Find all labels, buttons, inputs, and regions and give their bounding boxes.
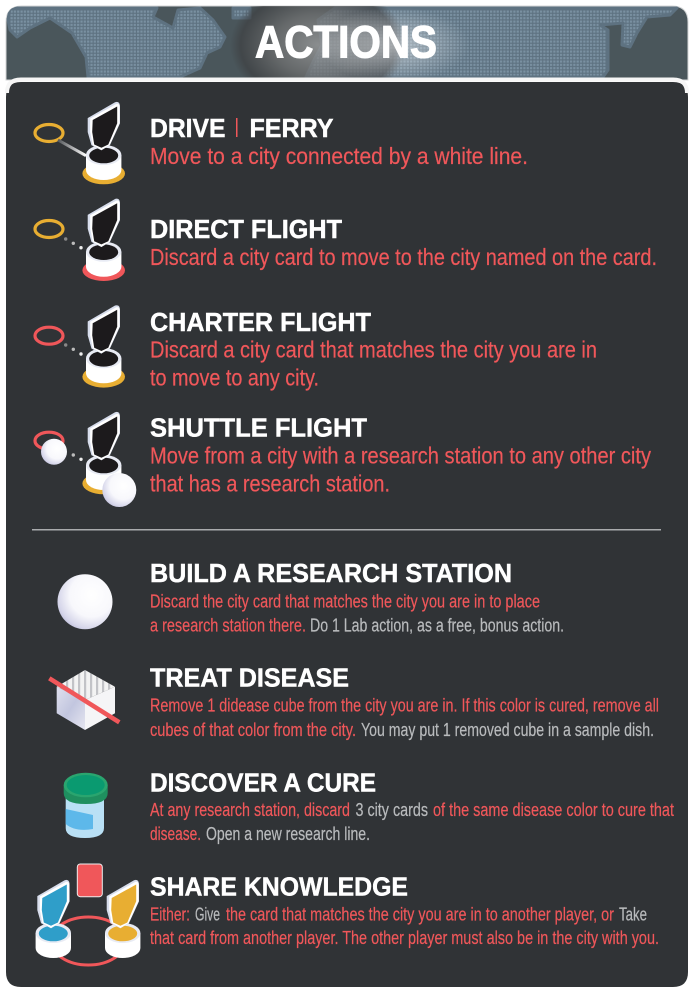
text: share knowledge: Either: [150,904,190,924]
icon: research station [58,574,112,629]
header band: world map with title [6,6,688,80]
icon: disease cube crossed out [49,670,119,730]
text: charter flight: Discard a city card that matches the city you are in [150,336,597,362]
icon: drive pawn [35,102,125,184]
heading: drive ferry: DRIVE [150,113,226,143]
text: share knowledge: Give [195,904,220,924]
text: share knowledge [150,904,659,948]
heading: treat disease: TREAT DISEASE [150,662,349,692]
heading: direct flight: DIRECT FLIGHT [150,214,342,244]
text: discover a cure: Open a new research line. [206,823,370,844]
text: discover a cure: 3 city cards [356,799,428,820]
text: treat disease: cubes of that color from the city. [150,719,356,740]
icon: charter flight pawn [35,306,125,388]
icon: cure jar [64,773,108,838]
text: discover a cure: disease. [150,823,201,844]
heading: share knowledge: SHARE KNOWLEDGE [150,872,408,902]
text: discover a cure [150,799,674,844]
heading: charter flight: CHARTER FLIGHT [150,307,371,337]
text: shuttle flight [150,442,651,496]
text: share knowledge: Take [619,904,647,924]
text: treat disease [150,694,659,740]
heading: drive ferry [150,113,334,143]
text: shuttle flight: that has a research station. [150,470,390,496]
text: charter flight: to move to any city. [150,364,319,390]
heading: discover a cure: DISCOVER A CURE [150,768,376,798]
heading: build a research station: BUILD A RESEARCH STATION [150,558,512,588]
text: build a research station: Do 1 Lab action, as a free, bonus action. [310,614,564,636]
icon: shuttle flight pawn with stations [35,412,136,507]
text: discover a cure: At any research station, discard [150,799,350,820]
text: build a research station: a research station there. [150,614,306,636]
icon: two players sharing a card [36,864,140,965]
text: build a research station: Discard the city card that matches the city you are in to place [150,590,540,612]
text: drive ferry: Move to a city connected by a white line. [150,143,528,169]
heading: shuttle flight: SHUTTLE FLIGHT [150,412,367,442]
text: build a research station [150,590,564,636]
icon: direct flight pawn [35,199,125,281]
title: ACTIONS [255,16,437,68]
heading: drive ferry: FERRY [250,113,334,143]
text: charter flight [150,336,597,390]
